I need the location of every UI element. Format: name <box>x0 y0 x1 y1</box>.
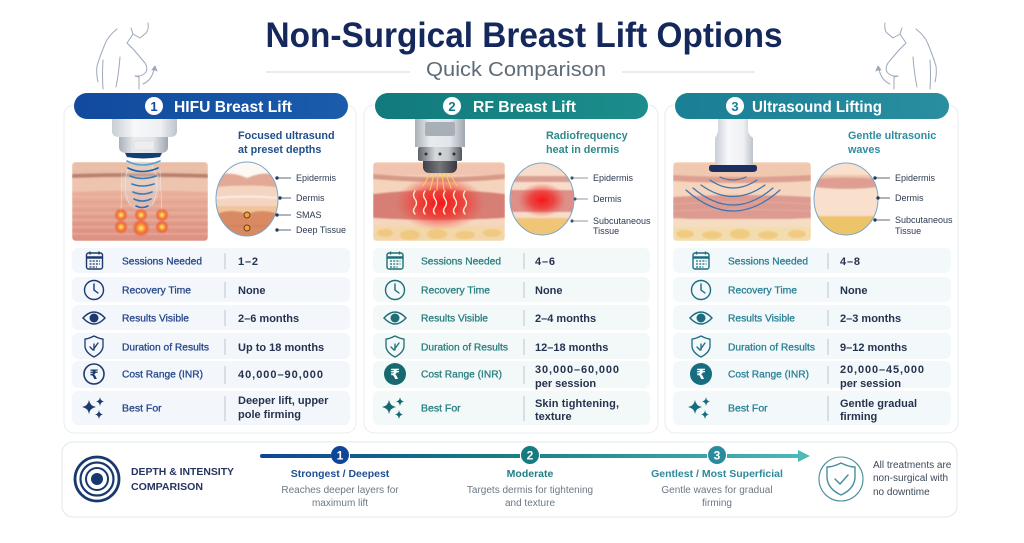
device: RF handpiece <box>415 119 465 173</box>
energy rays <box>423 174 457 190</box>
row: duration of results: Duration of Results <box>122 342 209 354</box>
row: recovery time: Recovery Time <box>728 284 797 296</box>
description: Radiofrequency <box>546 130 628 142</box>
row: best for: Best For <box>728 402 768 414</box>
comparison heading: DEPTH & INTENSITY <box>131 467 234 478</box>
tissue labels: Epidermis <box>593 173 634 183</box>
row: sessions needed: Sessions Needed <box>421 256 501 268</box>
step 3: gentlest: Gentlest / Most Superficial <box>651 468 783 480</box>
device: HIFU transducer <box>112 119 177 158</box>
row: best for <box>373 391 650 425</box>
icon: shield with check <box>819 457 863 501</box>
tissue labels: SMAS <box>296 210 322 220</box>
tissue labels: Epidermis <box>895 173 936 183</box>
step 1: strongest <box>281 446 399 509</box>
step 3: gentlest <box>651 446 783 509</box>
heading pill: HIFU <box>74 93 348 119</box>
tissue labels: Dermis <box>296 193 325 203</box>
tissue labels: Tissue <box>593 226 619 236</box>
tissue labels: Epidermis <box>296 173 337 183</box>
description: Focused ultrasund <box>238 130 335 142</box>
row: results visible <box>373 305 650 330</box>
row: cost range: 40,000–90,000 <box>238 369 323 381</box>
skin cross-section with heat <box>373 162 505 241</box>
tissue labels: Subcutaneous <box>895 215 953 225</box>
description: Gentle ultrasonic <box>848 130 936 142</box>
tissue labels <box>571 173 651 236</box>
row: best for: firming <box>840 411 877 423</box>
tissue labels: Tissue <box>895 226 921 236</box>
title: Non-Surgical Breast Lift Options <box>266 16 782 55</box>
row: best for: Skin tightening, <box>535 398 619 410</box>
note: non-surgical: non-surgical with <box>873 473 948 484</box>
comparison heading <box>131 467 234 493</box>
step 2: moderate <box>467 446 593 509</box>
row: best for <box>673 391 951 425</box>
row: cost range <box>673 361 951 390</box>
row: results visible: 2–6 months <box>238 313 299 325</box>
tissue labels <box>874 173 953 236</box>
row: results visible: 2–4 months <box>535 313 596 325</box>
note: non-surgical: All treatments are <box>873 460 952 471</box>
tissue labels: Dermis <box>593 194 622 204</box>
heading pill: ultrasound: 3 <box>731 99 739 114</box>
device: ultrasound probe <box>709 119 757 172</box>
note: non-surgical <box>873 460 952 498</box>
skin cross-section with waves <box>673 162 811 241</box>
comparison heading: COMPARISON <box>131 482 203 493</box>
row: duration of results <box>72 333 350 359</box>
description: waves <box>847 144 880 156</box>
focal points <box>114 208 169 237</box>
row: cost range: Cost Range (INR) <box>421 368 502 380</box>
arrow: intensity gradient bar <box>260 450 810 462</box>
row: cost range <box>72 361 350 388</box>
row: duration of results: Up to 18 months <box>238 342 324 354</box>
illustration: left body outline with lift arrow <box>97 23 157 89</box>
skin cross-section with focal points <box>72 160 208 241</box>
subtitle: Quick Comparison <box>426 59 606 81</box>
step 1: strongest: maximum lift <box>312 498 368 509</box>
row: cost range: 30,000–60,000 <box>535 364 619 376</box>
ultrasound arcs <box>686 177 780 211</box>
row: cost range <box>373 361 650 390</box>
note: non-surgical: no downtime <box>873 487 930 498</box>
row: duration of results: 9–12 months <box>840 342 907 354</box>
heading pill: ultrasound <box>675 93 949 119</box>
row: results visible <box>72 305 350 330</box>
heading pill: RF: RF Breast Lift <box>473 99 577 116</box>
row: sessions needed <box>673 248 951 273</box>
heading pill: ultrasound: Ultrasound Lifting <box>752 99 882 116</box>
row: recovery time <box>373 277 650 302</box>
row: sessions needed: 4–8 <box>840 256 860 268</box>
row: duration of results: Duration of Results <box>728 342 815 354</box>
description <box>847 130 936 156</box>
heat waves <box>414 191 466 214</box>
heading pill: HIFU: 1 <box>150 99 158 114</box>
row: recovery time: None <box>840 285 868 297</box>
step 2: moderate: 2 <box>527 448 534 462</box>
row: duration of results: Duration of Results <box>421 342 508 354</box>
panel: Ultrasound Lifting <box>665 93 958 433</box>
row: cost range: Cost Range (INR) <box>122 368 203 380</box>
row: sessions needed <box>373 248 650 273</box>
heading pill: HIFU: HIFU Breast Lift <box>174 99 293 116</box>
row: best for: Best For <box>122 402 162 414</box>
tissue labels: Deep Tissue <box>296 225 346 235</box>
row: results visible: Results Visible <box>122 312 189 324</box>
step 3: gentlest: firming <box>702 498 732 509</box>
zoom circle: tissue layers <box>510 163 574 238</box>
row: recovery time <box>673 277 951 302</box>
row: results visible <box>673 305 951 330</box>
row: sessions needed: Sessions Needed <box>728 256 808 268</box>
zoom circle: tissue layers <box>216 162 278 240</box>
icon: concentric target <box>75 457 119 501</box>
row: duration of results <box>373 333 650 359</box>
ultrasound waves <box>127 161 160 208</box>
row: cost range: ₹ <box>390 366 400 382</box>
row: cost range: per session <box>840 378 901 390</box>
step 2: moderate: Targets dermis for tightening <box>467 485 593 496</box>
description <box>546 130 628 156</box>
row: sessions needed <box>72 248 350 273</box>
tissue labels <box>276 173 346 235</box>
panel: RF Breast Lift <box>364 93 658 433</box>
row: best for: Gentle gradual <box>840 398 917 410</box>
row: recovery time: Recovery Time <box>421 284 490 296</box>
step 1: strongest: Strongest / Deepest <box>291 468 390 480</box>
row: results visible: 2–3 months <box>840 313 901 325</box>
row: cost range: per session <box>535 378 596 390</box>
illustration: right body outline with lift arrow <box>876 23 936 89</box>
heading pill: RF <box>375 93 648 119</box>
description: heat in dermis <box>546 144 619 156</box>
step 2: moderate: and texture <box>505 498 555 509</box>
description: at preset depths <box>238 144 321 156</box>
panel: HIFU Breast Lift <box>64 93 356 433</box>
row: recovery time: None <box>238 285 266 297</box>
row: sessions needed: Sessions Needed <box>122 256 202 268</box>
row: results visible: Results Visible <box>421 312 488 324</box>
step 1: strongest: Reaches deeper layers for <box>281 485 399 496</box>
row: results visible: Results Visible <box>728 312 795 324</box>
row: duration of results <box>673 333 951 359</box>
description <box>238 130 335 156</box>
step 3: gentlest: 3 <box>714 448 721 462</box>
heading pill: RF: 2 <box>448 99 456 114</box>
row: cost range: ₹ <box>696 366 706 382</box>
row: sessions needed: 4–6 <box>535 256 555 268</box>
step 3: gentlest: Gentle waves for gradual <box>661 485 773 496</box>
row: sessions needed: 1–2 <box>238 256 258 268</box>
row: best for: texture <box>535 411 572 423</box>
row: best for: Best For <box>421 402 461 414</box>
row: best for <box>72 391 350 425</box>
tissue labels: Dermis <box>895 193 924 203</box>
row: recovery time <box>72 277 350 302</box>
zoom circle: tissue layers <box>814 163 878 238</box>
panel: depth and intensity comparison <box>62 442 957 517</box>
row: cost range: Cost Range (INR) <box>728 368 809 380</box>
row: best for: Deeper lift, upper <box>238 395 329 407</box>
row: cost range: ₹ <box>89 367 99 382</box>
row: recovery time: None <box>535 285 562 297</box>
row: best for: pole firming <box>238 409 301 421</box>
row: duration of results: 12–18 months <box>535 342 608 354</box>
tissue labels: Subcutaneous <box>593 216 651 226</box>
row: cost range: 20,000–45,000 <box>840 364 924 376</box>
step 1: strongest: 1 <box>337 448 344 462</box>
row: recovery time: Recovery Time <box>122 284 191 296</box>
step 2: moderate: Moderate <box>507 468 553 480</box>
